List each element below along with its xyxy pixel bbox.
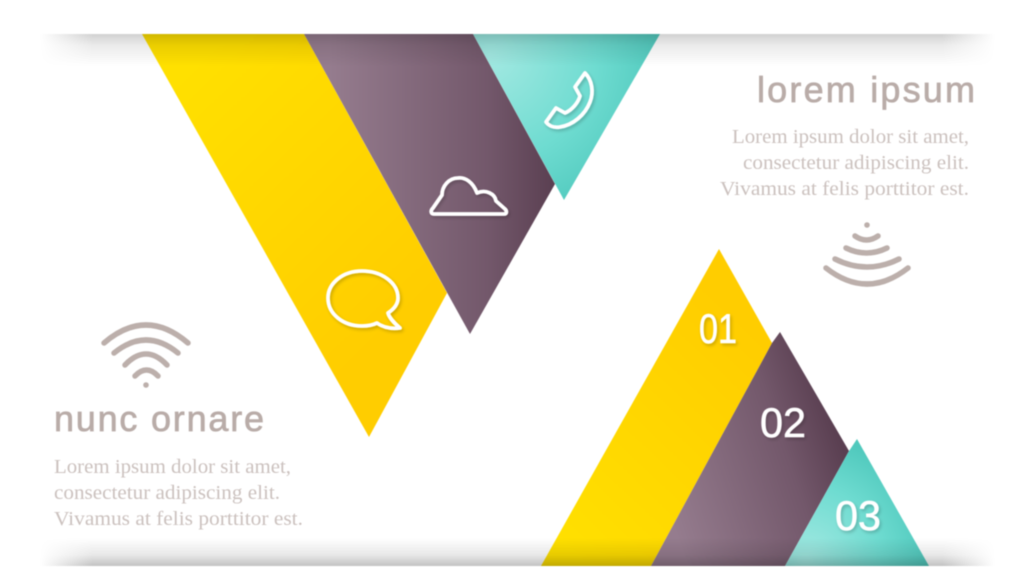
top yellow band: [142, 34, 447, 437]
number 02: 02: [760, 399, 806, 446]
text block: bottom left: [54, 457, 303, 530]
text block: top right: [720, 127, 969, 200]
heading: lorem ipsum: lorem ipsum: [757, 69, 975, 110]
top purple band: [304, 34, 555, 334]
icon: signal waves downward: [826, 222, 908, 284]
bottom yellow band: [541, 249, 772, 566]
bottom teal triangle: [785, 439, 929, 566]
text block: bottom left: Vivamus at felis porttitor est.: [54, 509, 303, 530]
icon: speech bubble: [328, 271, 400, 328]
text block: bottom left: Lorem ipsum dolor sit amet,: [54, 457, 291, 478]
number 03: 03: [835, 492, 881, 539]
bottom purple band: [651, 332, 849, 566]
icon: cloud: [431, 178, 506, 214]
heading: nunc ornare: nunc ornare: [54, 398, 264, 439]
bottom shadow band: [48, 544, 987, 566]
top inverted triangle: [142, 34, 660, 437]
top shadow band: [50, 34, 984, 58]
text block: top right: Vivamus at felis porttitor est.: [720, 179, 969, 200]
text block: top right: Lorem ipsum dolor sit amet,: [732, 127, 969, 148]
icon: wifi signal upward: [104, 325, 188, 388]
text block: bottom left: consectetur adipiscing elit.: [54, 483, 280, 504]
top teal triangle: [473, 34, 660, 200]
bottom upright triangle: [541, 249, 929, 566]
icon: phone: [546, 73, 592, 127]
number 01: 01: [699, 305, 737, 352]
text block: top right: consectetur adipiscing elit.: [743, 153, 969, 174]
